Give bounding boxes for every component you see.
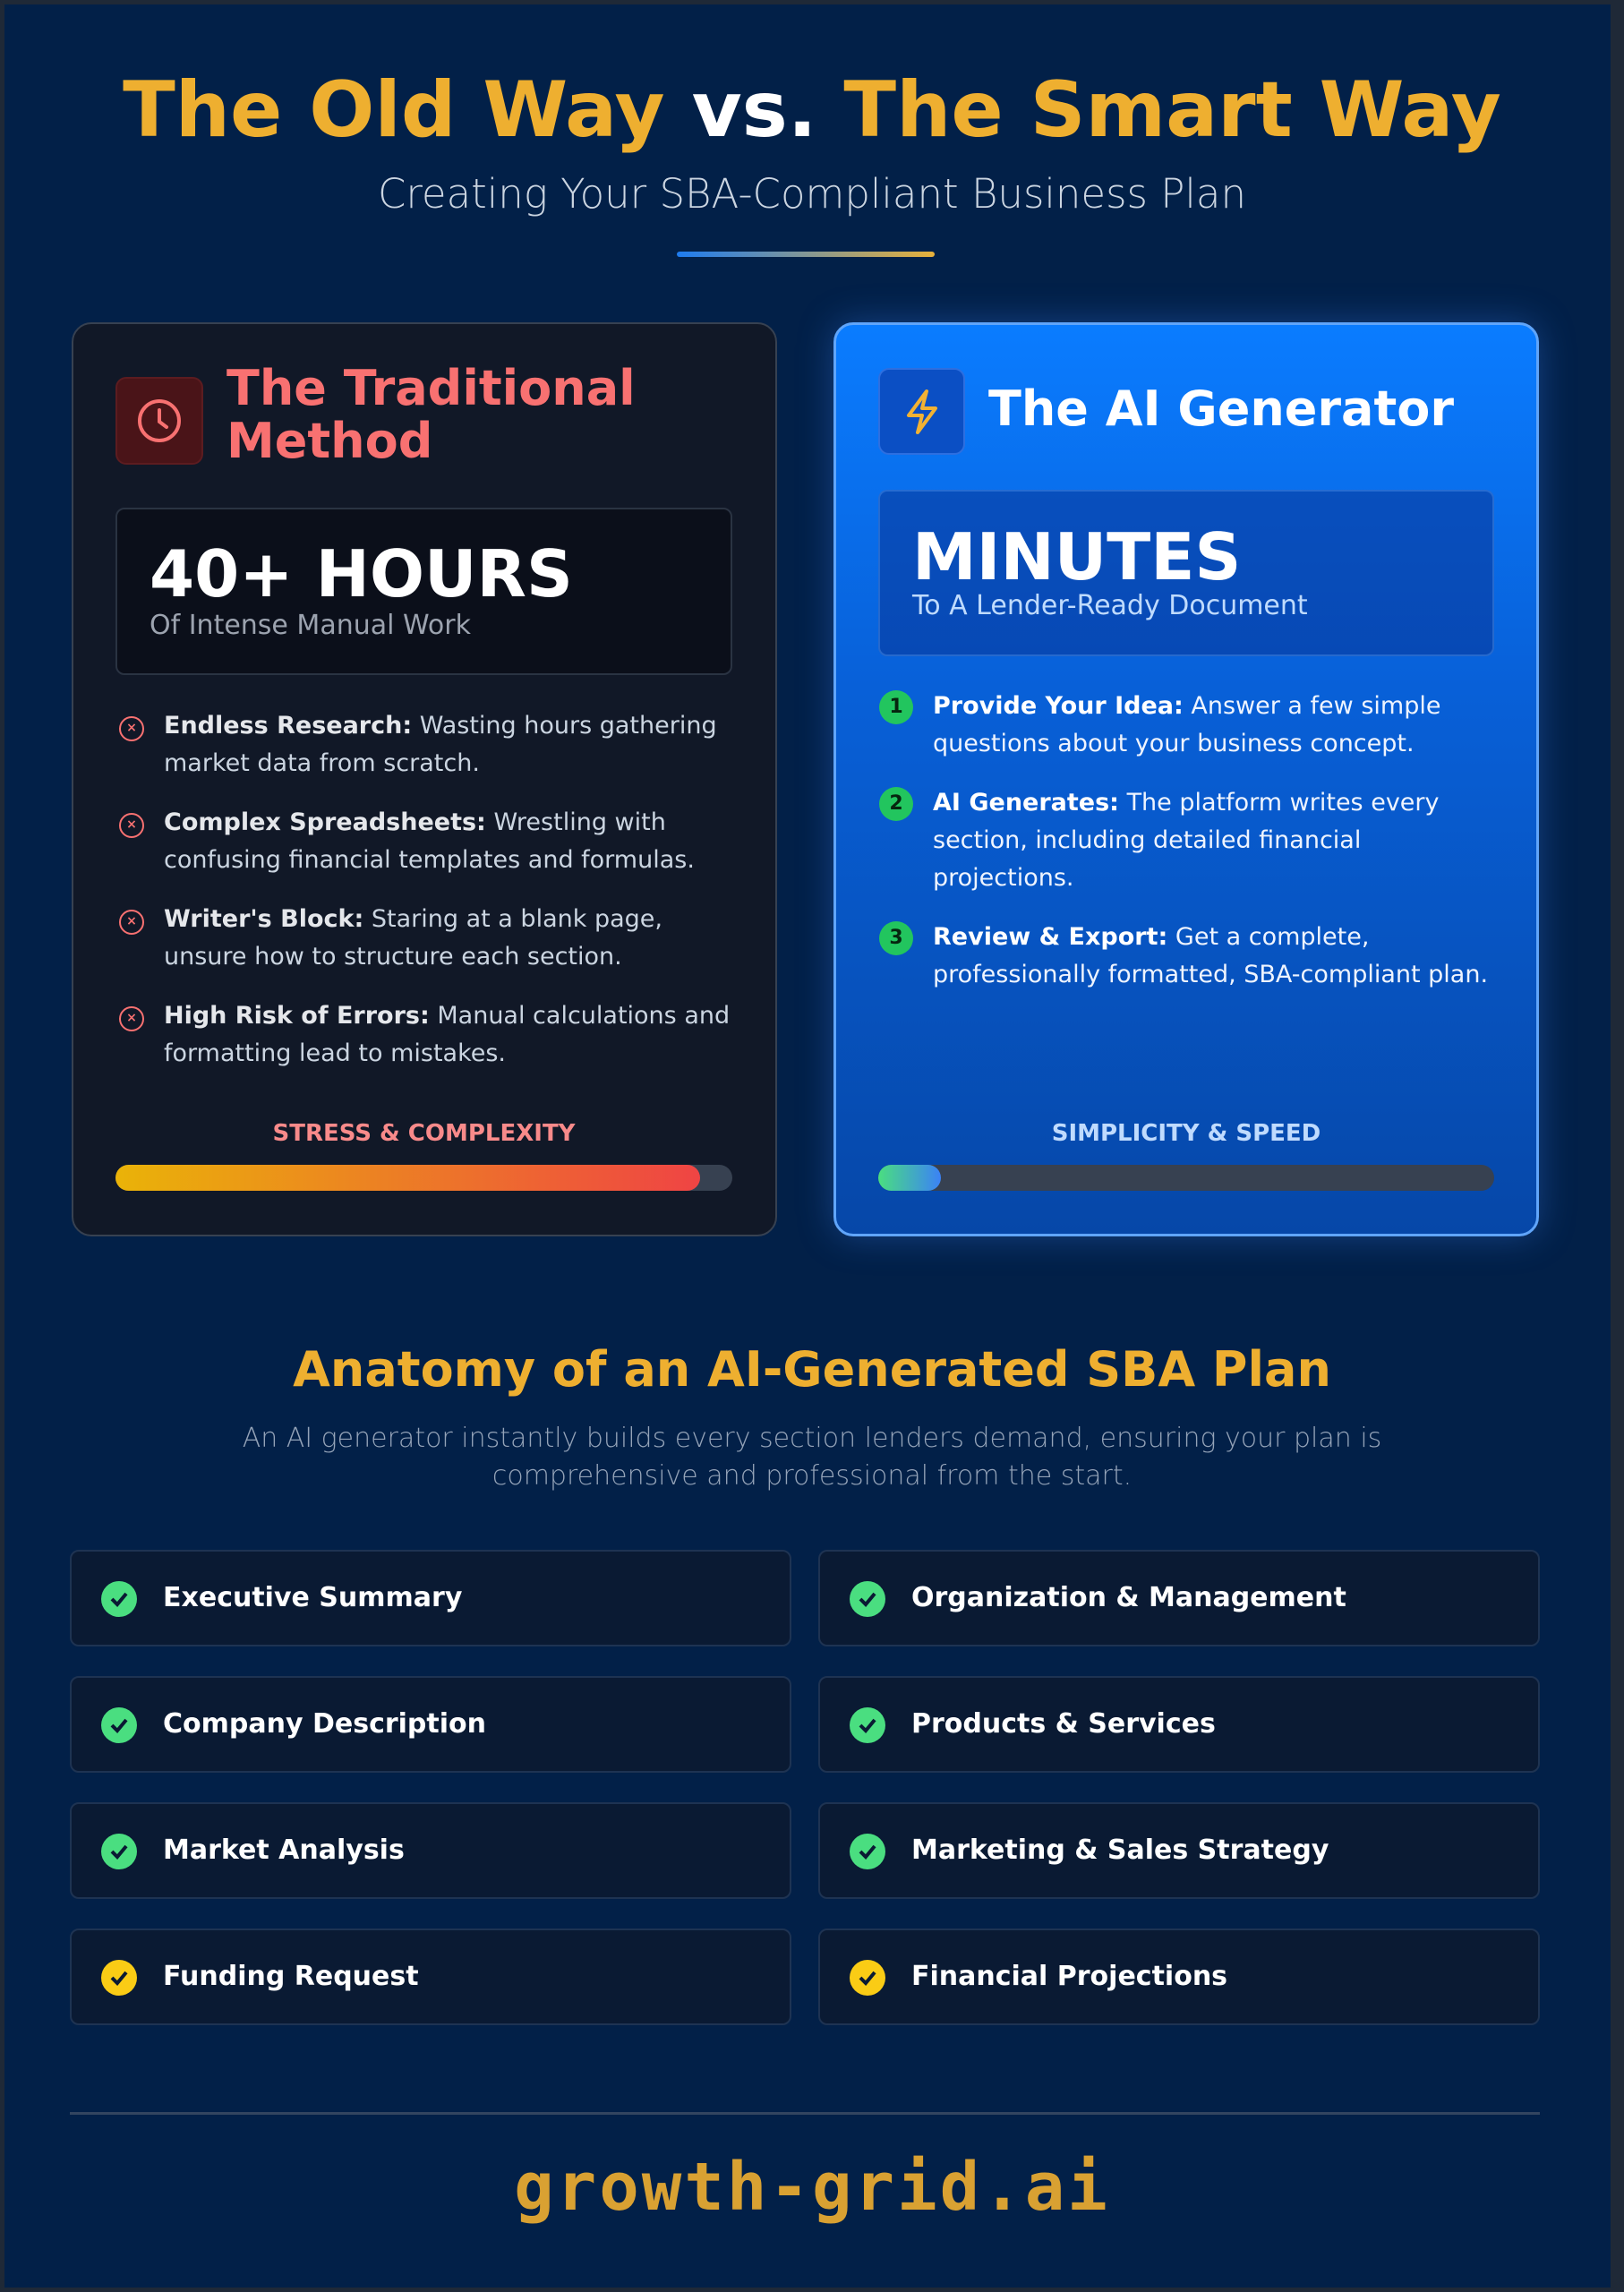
text: × bbox=[126, 721, 137, 735]
icon: lightning bbox=[878, 368, 965, 455]
section heading: anatomy: Anatomy of an AI-Generated SBA Plan bbox=[293, 1341, 1331, 1398]
title: The Old Way vs. The Smart Way bbox=[123, 65, 1501, 155]
item: market analysis: Market Analysis bbox=[163, 1834, 405, 1866]
text: 2 bbox=[889, 792, 903, 815]
item: funding bbox=[70, 1929, 791, 2025]
stat box: 40+ hours: Of Intense Manual Work bbox=[150, 610, 471, 641]
label: stress: STRESS & COMPLEXITY bbox=[272, 1120, 576, 1147]
step 3: Review & Export: Get a complete, professionally formatted, SBA-compliant plan. bbox=[933, 923, 1488, 988]
stat box: 40+ hours bbox=[115, 508, 732, 675]
item: writers block: Writer's Block: Staring at a blank page, unsure how to structure each section. bbox=[164, 905, 662, 971]
section description: An AI generator instantly builds every section lenders demand, ensuring your plan is comprehensive and professional from the start. bbox=[243, 1423, 1381, 1492]
footer brand: growth-grid.ai bbox=[514, 2149, 1110, 2226]
panel: AI generator bbox=[833, 322, 1539, 1236]
item: executive summary: Executive Summary bbox=[163, 1582, 462, 1613]
item: market analysis bbox=[70, 1802, 791, 1899]
icon: clock bbox=[115, 377, 203, 465]
item: research: Endless Research: Wasting hours gathering market data from scratch. bbox=[164, 712, 717, 777]
item: company description bbox=[70, 1676, 791, 1773]
heading: traditional: The Traditional Method bbox=[227, 360, 636, 469]
stat box: 40+ hours: 40+ HOURS bbox=[150, 536, 573, 611]
step 1: Provide Your Idea: Answer a few simple questions about your business concept. bbox=[933, 692, 1440, 757]
item: products: Products & Services bbox=[911, 1708, 1216, 1740]
step 2: AI Generates: The platform writes every section, including detailed financial projections. bbox=[933, 789, 1439, 892]
item: products bbox=[818, 1676, 1540, 1773]
checklist grid bbox=[70, 1550, 1540, 2025]
label: simplicity: SIMPLICITY & SPEED bbox=[1052, 1120, 1321, 1147]
stat box: minutes: To A Lender-Ready Document bbox=[912, 590, 1308, 621]
item: marketing bbox=[818, 1802, 1540, 1899]
list: pain points bbox=[119, 712, 730, 1067]
text: 1 bbox=[889, 696, 903, 718]
item: executive summary bbox=[70, 1550, 791, 1646]
text: × bbox=[126, 817, 137, 832]
panel: traditional method bbox=[72, 322, 777, 1236]
item: spreadsheets: Complex Spreadsheets: Wrestling with confusing financial templates and formulas. bbox=[164, 808, 695, 874]
bar: stress bbox=[115, 1165, 732, 1191]
item: financial projections: Financial Projections bbox=[911, 1961, 1227, 1992]
item: errors: High Risk of Errors: Manual calculations and formatting lead to mistakes. bbox=[164, 1002, 730, 1067]
heading: AI generator: The AI Generator bbox=[988, 381, 1454, 437]
bar: simplicity bbox=[878, 1165, 1494, 1191]
item: company description: Company Description bbox=[163, 1708, 486, 1740]
item: funding: Funding Request bbox=[163, 1961, 419, 1992]
text: 3 bbox=[889, 927, 903, 949]
item: organization: Organization & Management bbox=[911, 1582, 1346, 1613]
item: financial projections bbox=[818, 1929, 1540, 2025]
divider accent bbox=[677, 252, 935, 257]
item: marketing: Marketing & Sales Strategy bbox=[911, 1834, 1329, 1866]
subtitle: Creating Your SBA-Compliant Business Plan bbox=[378, 170, 1246, 218]
stat box: minutes bbox=[878, 490, 1494, 656]
stat box: minutes: MINUTES bbox=[912, 519, 1241, 594]
text: × bbox=[126, 914, 137, 928]
text: × bbox=[126, 1011, 137, 1025]
steps list bbox=[879, 690, 1488, 988]
item: organization bbox=[818, 1550, 1540, 1646]
